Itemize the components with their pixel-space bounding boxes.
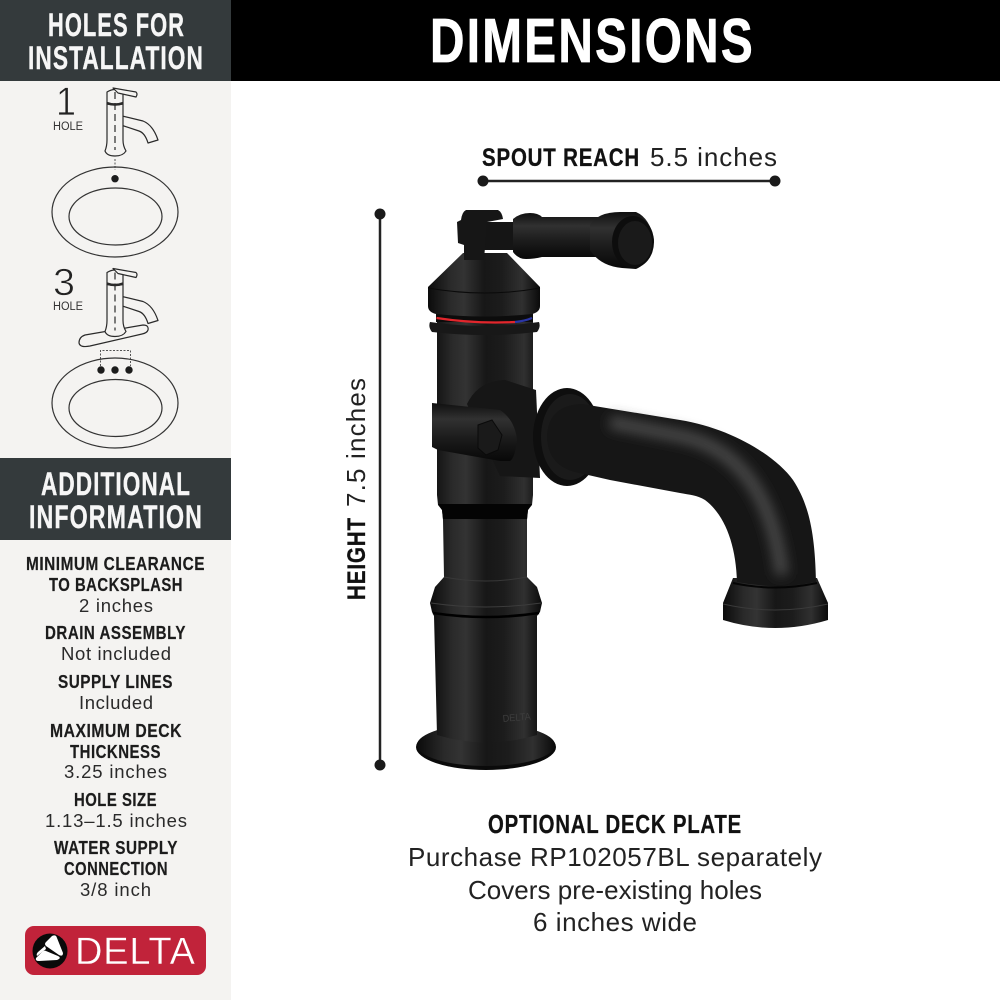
text block: additional information list (26, 554, 205, 900)
spec: maximum deck thickness (50, 721, 182, 782)
spec: minimum clearance: 2 inches (79, 595, 153, 616)
label: 1 hole (53, 80, 83, 133)
heading: additional information (0, 458, 231, 540)
spec: supply lines: SUPPLY LINES (58, 672, 173, 692)
faucet body (430, 320, 542, 742)
text block: optional deck plate: 6 inches wide (533, 907, 697, 937)
title banner: dimensions: DIMENSIONS (430, 7, 755, 76)
label: 1 hole: 1 (56, 80, 76, 124)
text block: optional deck plate: Covers pre-existing holes (468, 875, 762, 905)
heading: holes for installation: INSTALLATION (28, 40, 204, 76)
spec: water supply connection: CONNECTION (64, 859, 168, 879)
text block: optional deck plate (408, 809, 822, 937)
faucet lever handle (457, 210, 654, 269)
heading: holes for installation (0, 0, 231, 81)
title banner: dimensions (231, 0, 1000, 81)
icon: deck plate (79, 325, 148, 347)
logo: delta (25, 926, 206, 975)
faucet foot (723, 578, 828, 628)
label: 3 hole (53, 262, 83, 313)
icon: faucet (105, 88, 158, 156)
logo: delta: DELTA (75, 931, 196, 973)
text block: optional deck plate: Purchase RP102057BL separately (408, 842, 822, 872)
dimension: height: HEIGHT (343, 517, 371, 600)
dimension: height: 7.5 inches (341, 378, 371, 507)
spec: maximum deck thickness: THICKNESS (70, 742, 161, 762)
spec: water supply connection: WATER SUPPLY (54, 838, 178, 858)
dimension: height (341, 208, 386, 770)
faucet clamp and flange (432, 380, 601, 486)
spec: water supply connection (54, 838, 178, 900)
product image: black faucet (416, 210, 828, 770)
icon: sink with one hole (52, 159, 178, 257)
label: 3 hole: HOLE (53, 301, 83, 313)
faucet body: DELTA (502, 712, 531, 725)
label: 1 hole: HOLE (53, 121, 83, 133)
faucet cap (428, 253, 540, 316)
spec: minimum clearance: MINIMUM CLEARANCE (26, 554, 205, 574)
spec: minimum clearance: TO BACKSPLASH (49, 575, 183, 595)
dimension: spout reach (478, 142, 780, 186)
spec: hole size: HOLE SIZE (74, 790, 157, 810)
panel: sidebar (0, 0, 231, 1000)
faucet collar with red and blue hot-cold ring (429, 308, 540, 335)
dimension: spout reach: SPOUT REACH (482, 144, 640, 172)
panel: three hole installation (52, 262, 178, 448)
faucet spout (547, 404, 816, 586)
spec: maximum deck thickness: MAXIMUM DECK (50, 721, 182, 741)
icon: sink with three holes (52, 350, 178, 448)
dimension: spout reach: 5.5 inches (650, 142, 777, 172)
spec: supply lines (58, 672, 173, 713)
spec: hole size (45, 790, 187, 831)
spec: hole size: 1.13–1.5 inches (45, 810, 187, 831)
heading: additional information: INFORMATION (29, 499, 203, 535)
spec: minimum clearance (26, 554, 205, 616)
spec: supply lines: Included (79, 692, 153, 713)
faucet base (416, 724, 556, 770)
label: 3 hole: 3 (53, 262, 75, 304)
panel: one hole installation (52, 80, 178, 257)
spec: drain assembly: DRAIN ASSEMBLY (45, 623, 186, 643)
heading: additional information: ADDITIONAL (41, 466, 191, 502)
spec: water supply connection: 3/8 inch (80, 879, 151, 900)
icon: faucet on deck plate (105, 268, 158, 336)
spec: drain assembly: Not included (61, 643, 171, 664)
spec: maximum deck thickness: 3.25 inches (64, 761, 167, 782)
spec: drain assembly (45, 623, 186, 664)
text block: optional deck plate: OPTIONAL DECK PLATE (488, 809, 742, 839)
heading: holes for installation: HOLES FOR (48, 7, 185, 43)
